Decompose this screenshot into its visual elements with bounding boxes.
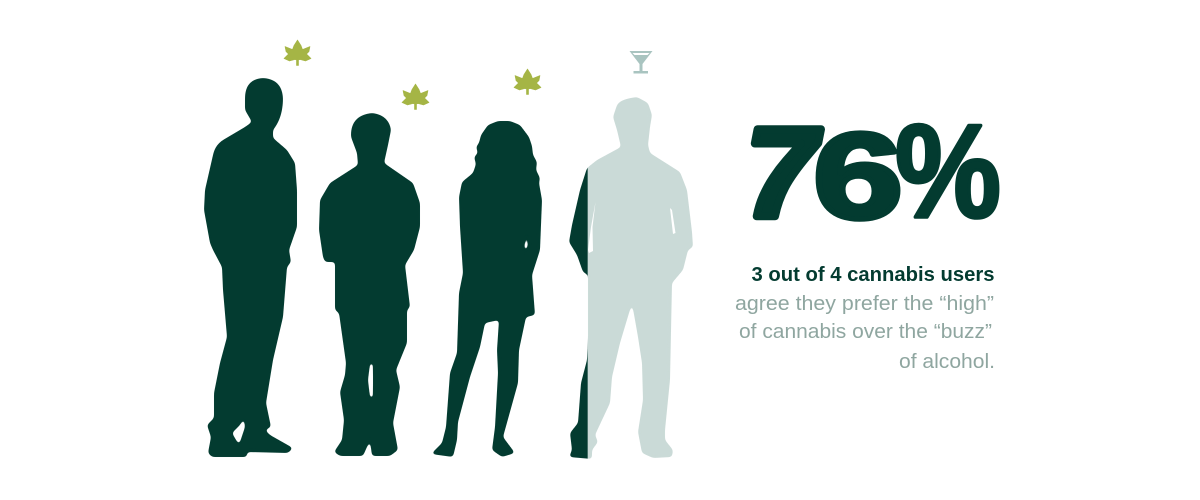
big number 76% [746,98,1001,246]
text block: description [735,264,995,373]
text block: description: of cannabis over the “buzz” [739,321,992,343]
big number 76%: % [895,98,1001,246]
text block: description: 3 out of 4 cannabis users [752,264,994,286]
icon: cannabis leaf 3 [514,69,541,94]
icon: cannabis leaf 1 [284,40,311,66]
icon: cannabis leaf 2 [402,84,429,110]
text block: description: of alcohol. [899,351,995,373]
person 1 silhouette [204,78,297,457]
person 4 silhouette, split dark and light [569,97,693,459]
big number 76%: 6 [813,108,903,244]
person 2 silhouette [319,113,420,456]
text block: description: agree they prefer the “high” [735,293,994,315]
big number 76%: 7 [746,102,821,243]
person 3 silhouette [431,121,542,457]
icon: martini glass [630,51,652,74]
